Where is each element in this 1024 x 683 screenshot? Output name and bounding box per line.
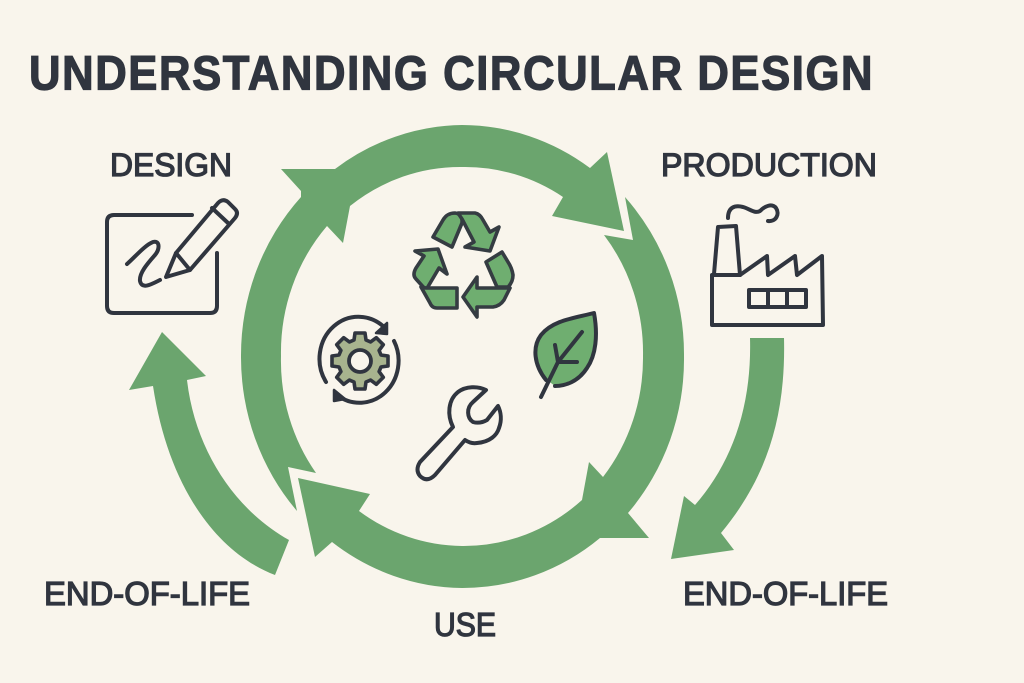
arrow: end-of-life to design — [129, 332, 289, 575]
icon: wrench — [418, 387, 501, 479]
icon: recycling symbol — [414, 213, 513, 317]
icon: design pencil — [107, 200, 237, 313]
icon: production factory — [712, 205, 823, 325]
label: production: PRODUCTION — [661, 147, 877, 183]
label: design: DESIGN — [110, 147, 232, 183]
icon: leaf — [535, 313, 596, 397]
icon: gear with cycle arrows — [319, 317, 399, 403]
label: end-of-life right: END-OF-LIFE — [683, 575, 888, 612]
label: end-of-life left: END-OF-LIFE — [44, 575, 250, 612]
title: UNDERSTANDING CIRCULAR DESIGN — [29, 46, 873, 100]
arrow: ring left and top — [241, 125, 624, 511]
label: use: USE — [434, 606, 496, 643]
arrow: ring right and bottom — [298, 197, 684, 588]
arrow: production to end-of-life — [671, 338, 784, 559]
